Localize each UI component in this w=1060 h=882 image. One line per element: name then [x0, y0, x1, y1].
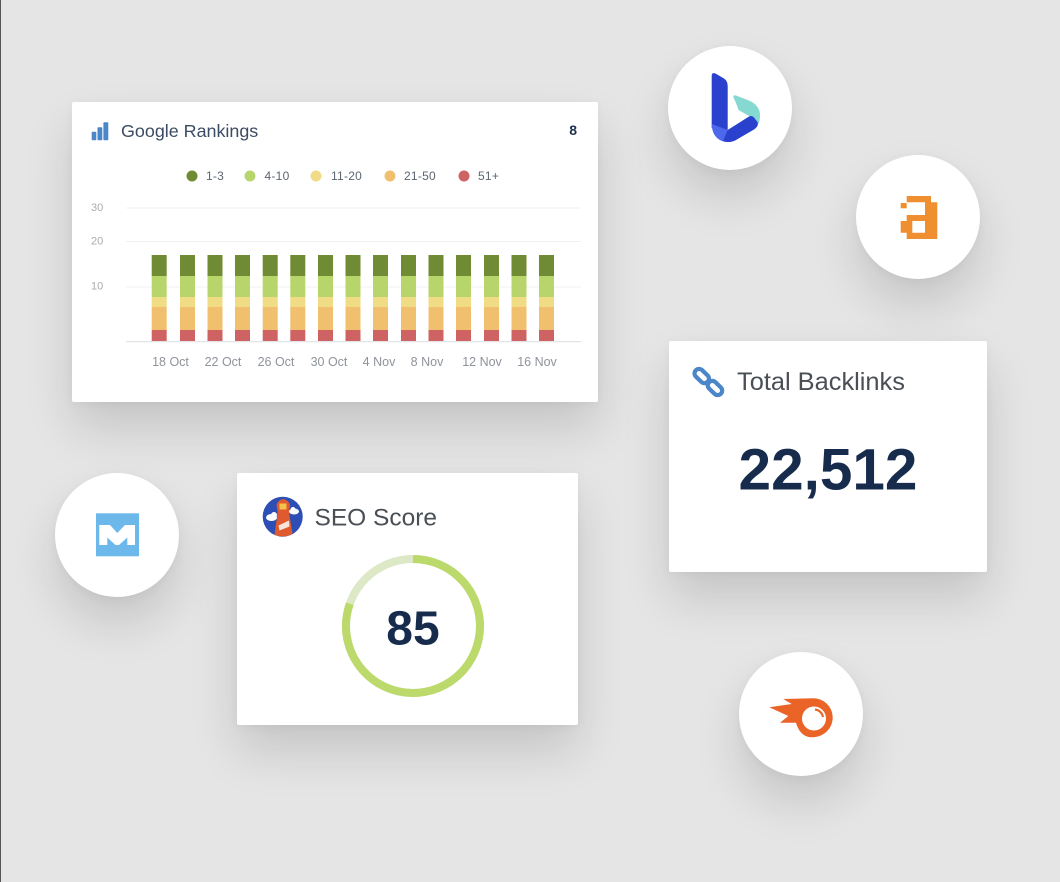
value: 22,512: 22,512 [739, 438, 917, 502]
panel: Total Backlinks [669, 341, 987, 572]
icon: bar chart [92, 122, 108, 140]
chart legend: 4-10 [264, 169, 290, 183]
chart legend [186, 169, 499, 183]
panel: SEO Score [237, 473, 578, 725]
panel: Google Rankings [72, 102, 598, 402]
icon: chain link [693, 367, 724, 397]
chart legend: 1-3 [206, 169, 224, 183]
heading: Total Backlinks: Total Backlinks [737, 368, 905, 396]
heading: Google Rankings: Google Rankings [121, 121, 258, 141]
icon: Bing badge [668, 46, 792, 170]
chart legend: 11-20 [331, 169, 362, 183]
stacked bar chart: 16 Nov [517, 355, 558, 369]
stacked bar chart: 22 Oct [205, 355, 242, 369]
chart legend: 21-50 [404, 169, 436, 183]
stacked bar chart: 18 Oct [152, 355, 189, 369]
stacked bar chart: 12 Nov [462, 355, 503, 369]
chart legend: 51+ [478, 169, 499, 183]
heading: SEO Score: SEO Score [314, 504, 437, 532]
stacked bar chart: 4 Nov [363, 355, 396, 369]
value: 85: 85 [386, 602, 440, 655]
stacked bar chart [91, 202, 581, 369]
icon: M badge [55, 473, 179, 597]
stacked bar chart: 26 Oct [258, 355, 295, 369]
stacked bar chart: 20 [91, 236, 103, 248]
icon: Ahrefs-style a badge [856, 155, 980, 279]
icon: lighthouse [263, 497, 303, 537]
gauge ring [346, 559, 480, 693]
stacked bar chart: 30 [91, 202, 103, 214]
stacked bar chart: 30 Oct [311, 355, 348, 369]
total value: 8 [569, 122, 577, 138]
stacked bar chart: 8 Nov [411, 355, 444, 369]
stacked bar chart: 10 [91, 280, 103, 292]
icon: Semrush badge [739, 652, 863, 776]
